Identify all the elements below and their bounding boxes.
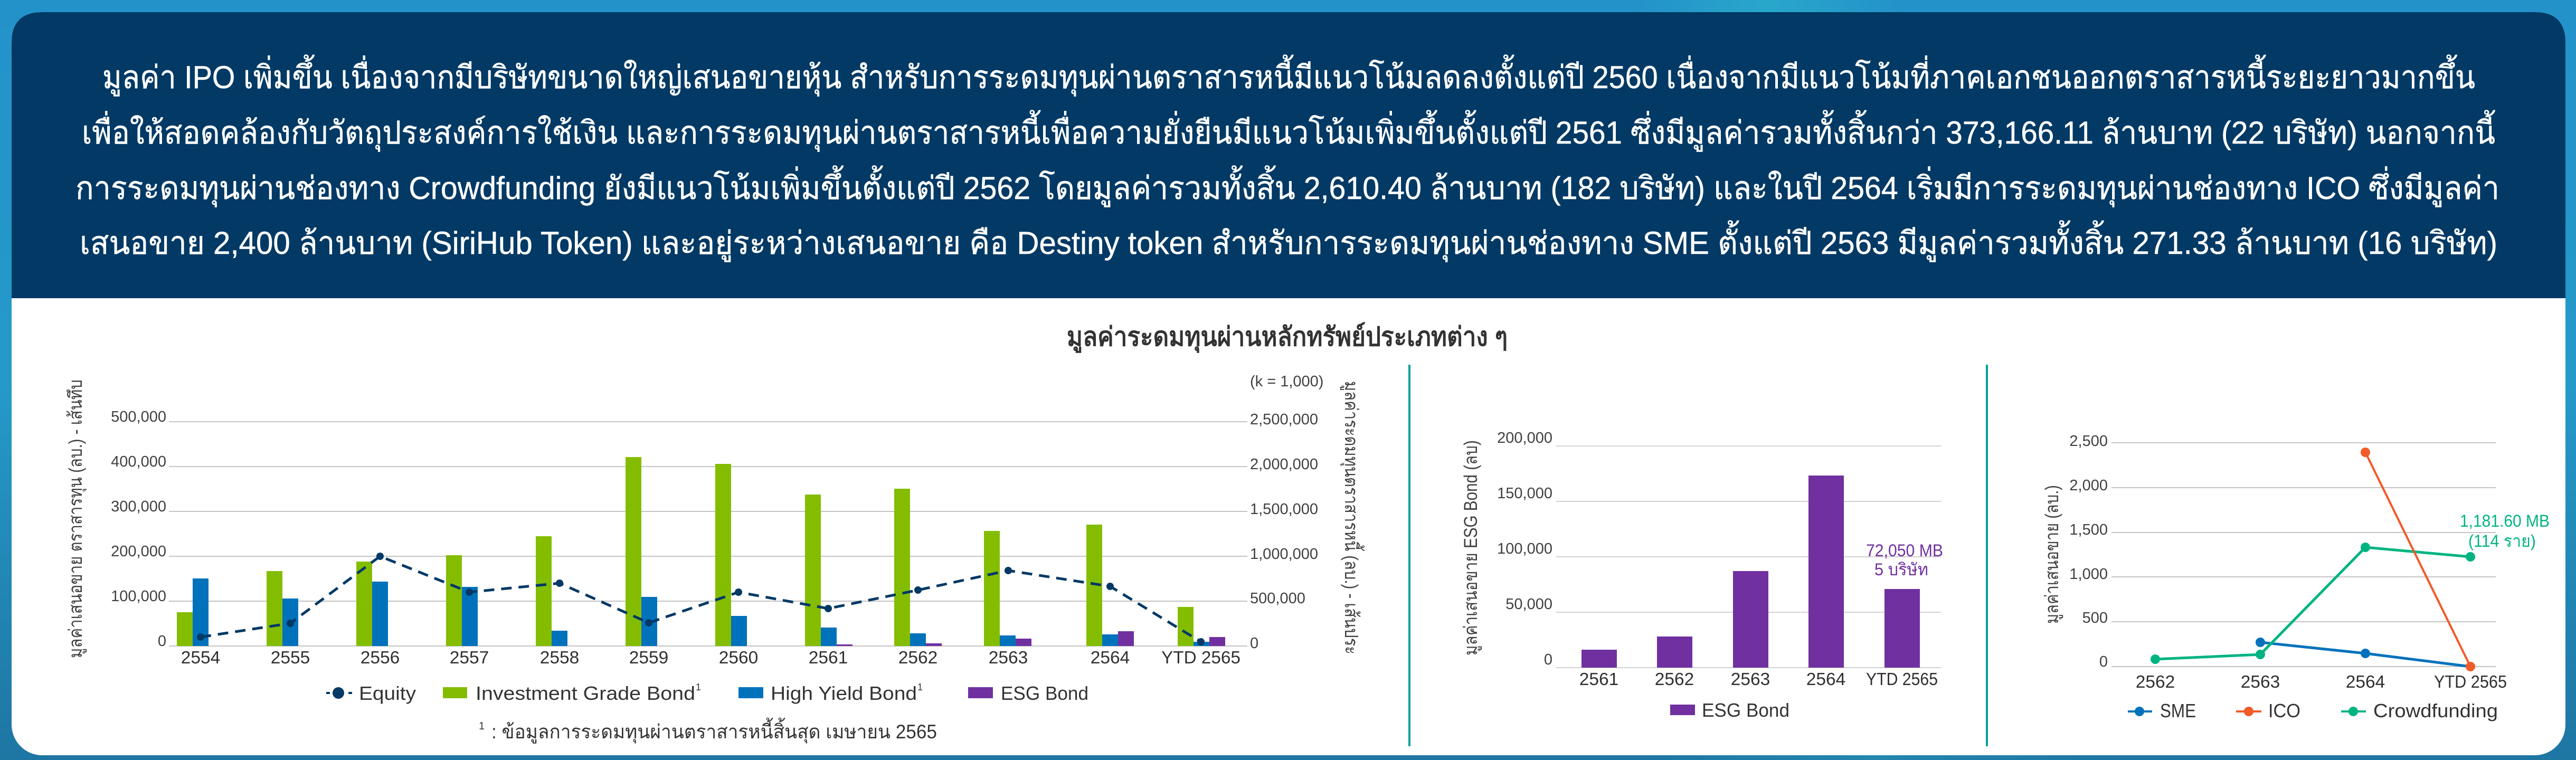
chart: SME, ICO and crowdfunding: 0 (2099, 653, 2108, 670)
summary text block: เสนอขาย 2,400 ล้านบาท (SiriHub Token) และอยู่ระหว่างเสนอขาย คือ Destiny token สำหรับการระดมทุนผ่านช่องทาง SME ตั้งแต่ปี 2563 มีมูลค่ารวมทั้งสิ้น 271.33 ล้านบาท (16 บริษัท) (80, 220, 2497, 262)
category axis labels: 2556 (361, 648, 400, 668)
category axis labels (181, 648, 1240, 668)
category labels: YTD 2565 (1866, 670, 1938, 689)
left axis labels: 500,000 (111, 408, 166, 425)
right axis labels: 2,000,000 (1250, 456, 1318, 473)
callout: crowdfunding YTD value (2460, 511, 2550, 550)
category labels (1579, 670, 1938, 689)
divider: right (1986, 365, 1988, 746)
chart: SME, ICO and crowdfunding: 500 (2082, 610, 2108, 626)
right axis labels (1250, 373, 1323, 652)
legend: 1 (917, 682, 923, 692)
summary text block: เพื่อให้สอดคล้องกับวัตถุประสงค์การใช้เงิน และการระดมทุนผ่านตราสารหนี้เพื่อความยั่งยืนมีแนวโน้มเพิ่มขึ้นตั้งแต่ปี 2561 ซึ่งมีมูลค่ารวมทั้งสิ้นกว่า 373,166.11 ล้านบาท (22 บริษัท) นอกจากนี้ (82, 110, 2495, 152)
category axis labels: 2559 (629, 648, 668, 668)
panel: summary header (12, 12, 2565, 298)
right axis labels: 2,500,000 (1250, 411, 1318, 428)
legend: ICO (2268, 700, 2300, 721)
bars: investment grade bond (177, 457, 1194, 646)
category axis labels: 2563 (989, 648, 1028, 668)
legend: High Yield Bond (771, 682, 917, 704)
chart: SME, ICO and crowdfunding (2042, 433, 2550, 721)
heading: chart section title: มูลค่าระดมทุนผ่านหลักทรัพย์ประเภทต่าง ๆ (1067, 322, 1508, 353)
line: crowdfunding (2151, 543, 2475, 664)
right axis labels: (k = 1,000) (1250, 373, 1323, 390)
legend: ESG Bond (1702, 699, 1789, 721)
category axis labels: 2555 (271, 648, 310, 668)
line: ICO (2361, 448, 2475, 671)
divider: left (1408, 365, 1410, 746)
left axis title: มูลค่าเสนอขาย ตราสารทุน (ลบ.) - เส้นทึบ (65, 379, 87, 658)
right axis labels: 0 (1250, 635, 1258, 652)
footnote: : ข้อมูลการระดมทุนผ่านตราสารหนี้สิ้นสุด เมษายน 2565 (491, 717, 937, 744)
legend (326, 682, 1088, 704)
chart: SME, ICO and crowdfunding: 2,000 (2069, 477, 2108, 494)
category axis labels: 2562 (898, 648, 937, 668)
category axis labels: 2558 (540, 648, 579, 668)
category labels: 2561 (1579, 670, 1618, 689)
right axis title: มูลค่าระดมทุนตราสารหนี้ (ลบ.) - เส้นประ (1340, 381, 1365, 654)
chart: SME, ICO and crowdfunding: 1,500 (2069, 521, 2108, 538)
y axis title: มูลค่าเสนอขาย (ลบ.) (2042, 485, 2063, 624)
right axis labels: 500,000 (1250, 590, 1305, 607)
category labels: 2563 (2241, 672, 2280, 692)
right axis labels: 1,500,000 (1250, 501, 1318, 518)
bars: high yield bond (193, 578, 1209, 646)
category axis labels: 2557 (450, 648, 489, 668)
summary text block: การระดมทุนผ่านช่องทาง Crowdfunding ยังมีแนวโน้มเพิ่มขึ้นตั้งแต่ปี 2562 โดยมูลค่ารวมทั้งสิ้น 2,610.40 ล้านบาท (182 บริษัท) และในปี 2564 เริ่มมีการระดมทุนผ่านช่องทาง ICO ซึ่งมีมูลค่า (75, 165, 2499, 207)
chart: ESG bond: 200,000 (1497, 430, 1552, 446)
y axis title: มูลค่าเสนอขาย ESG Bond (ลบ) (1461, 440, 1482, 656)
category labels: 2562 (1655, 670, 1694, 689)
category labels: 2563 (1731, 670, 1770, 689)
summary text block (75, 54, 2499, 262)
line: equity (197, 553, 1205, 645)
chart: capital raised by security type, 2554 to YTD 2565 (65, 373, 1365, 744)
left axis labels: 0 (158, 633, 166, 650)
category axis labels: 2564 (1091, 648, 1130, 668)
category labels: YTD 2565 (2434, 672, 2507, 692)
category labels: 2564 (2346, 672, 2385, 692)
legend (2128, 700, 2498, 721)
category labels: 2562 (2136, 672, 2175, 692)
bars (1581, 476, 1920, 668)
category labels (2136, 672, 2507, 692)
legend: 1 (696, 682, 701, 692)
callout: YTD 2565 value: 72,050 MB (1866, 541, 1943, 560)
category axis labels: 2560 (719, 648, 758, 668)
left axis labels: 100,000 (111, 588, 166, 605)
chart: ESG bond: 100,000 (1497, 540, 1552, 557)
legend: ESG Bond (1001, 682, 1088, 704)
chart: ESG bond (1461, 430, 1943, 721)
bars: ESG bond (837, 631, 1225, 646)
chart: ESG bond: 50,000 (1505, 596, 1552, 613)
chart: SME, ICO and crowdfunding: 2,500 (2069, 433, 2108, 450)
line: SME (2256, 638, 2470, 667)
left axis labels: 400,000 (111, 453, 166, 470)
chart: SME, ICO and crowdfunding: 1,000 (2069, 566, 2108, 583)
left axis labels (111, 408, 166, 650)
chart: ESG bond: 0 (1544, 651, 1552, 668)
footnote: 1 (479, 720, 485, 732)
legend: SME (2160, 700, 2196, 721)
chart: ESG bond: 150,000 (1497, 485, 1552, 502)
legend: Equity (359, 682, 416, 704)
callout: YTD 2565 value: 5 บริษัท (1874, 560, 1928, 579)
category axis labels: 2561 (809, 648, 848, 668)
category labels: 2564 (1806, 670, 1845, 689)
callout: crowdfunding YTD value: (114 ราย) (2468, 531, 2536, 550)
category axis labels: 2554 (181, 648, 220, 668)
callout: crowdfunding YTD value: 1,181.60 MB (2460, 511, 2550, 530)
legend: Crowdfunding (2373, 700, 2498, 721)
callout: YTD 2565 value (1866, 541, 1943, 579)
legend: Investment Grade Bond (476, 682, 695, 704)
left axis labels: 300,000 (111, 498, 166, 515)
right axis labels: 1,000,000 (1250, 546, 1318, 563)
category axis labels: YTD 2565 (1161, 648, 1240, 668)
left axis labels: 200,000 (111, 543, 166, 560)
